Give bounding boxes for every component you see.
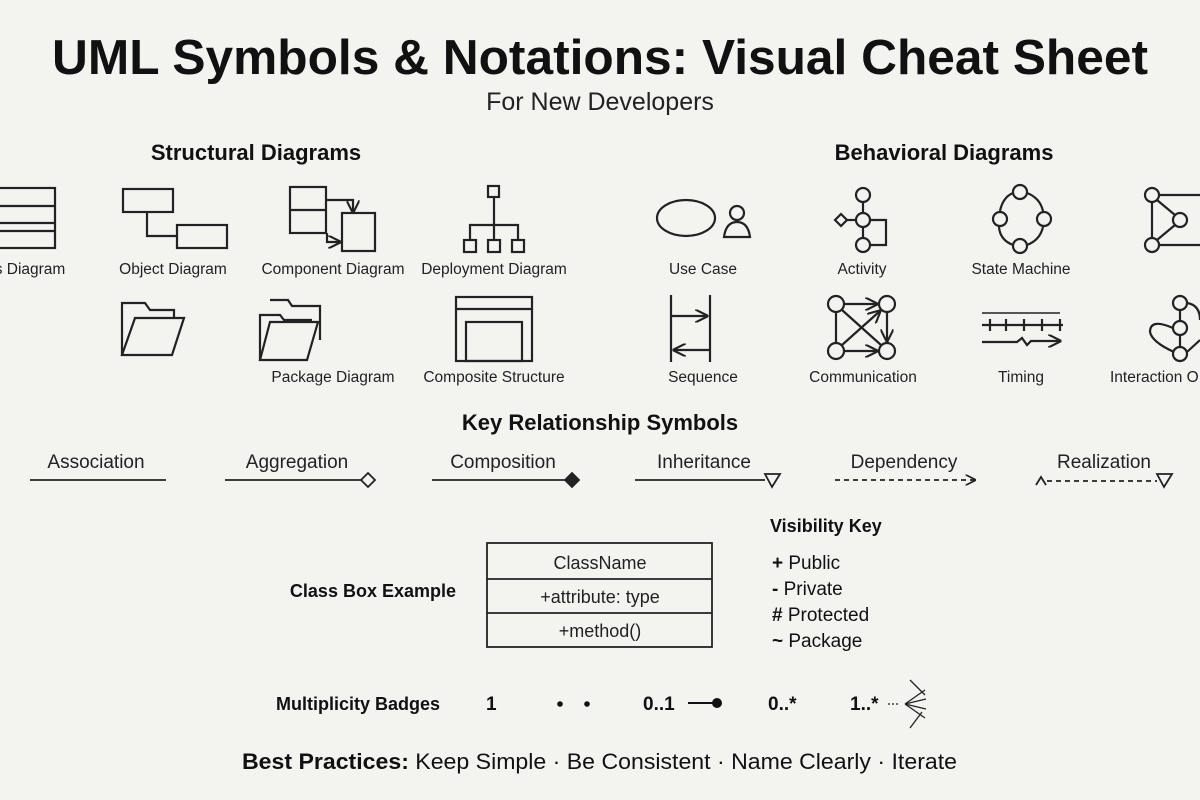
panel: relationships: Association (47, 452, 145, 473)
icon: sequence (671, 295, 710, 362)
icon: state machine (993, 185, 1051, 253)
behavioral labels: Use Case (669, 261, 737, 278)
panel: relationships: Dependency (851, 452, 958, 473)
icon: object diagram (123, 189, 227, 248)
icon: class diagram (0, 188, 55, 248)
behavioral labels: Sequence (668, 369, 738, 386)
icon: activity (835, 188, 886, 252)
visibility key (770, 516, 882, 652)
class box: +method() (559, 621, 641, 641)
panel: structural icons (0, 186, 532, 361)
icon: folder (122, 303, 184, 355)
icon: package diagram (260, 300, 320, 360)
structural labels: Object Diagram (119, 261, 227, 278)
text: class box example: Class Box Example (290, 581, 456, 601)
panel: relationships: Inheritance (657, 452, 751, 473)
behavioral labels: Communication (809, 369, 917, 386)
panel: relationships: Aggregation (246, 452, 348, 473)
heading: structural: Structural Diagrams (151, 140, 361, 165)
behavioral labels: Interaction O (1110, 369, 1199, 386)
multiplicity badges: 0..* (768, 694, 797, 715)
icon: deployment diagram (464, 186, 524, 252)
behavioral labels: Timing (998, 369, 1044, 386)
visibility key: ~ Package (772, 631, 862, 652)
visibility key: Visibility Key (770, 516, 882, 536)
multiplicity badges: 0..1 (643, 694, 675, 715)
icon: component diagram (290, 187, 375, 251)
structural labels: Package Diagram (271, 369, 395, 386)
class box: +attribute: type (540, 587, 660, 607)
title: UML Symbols & Notations: Visual Cheat Sheet (52, 31, 1148, 85)
icon: composite structure (456, 297, 532, 361)
icon: use case (657, 200, 750, 237)
class box: ClassName (553, 553, 647, 573)
structural labels: Component Diagram (261, 261, 405, 278)
multiplicity badges: 1..* (850, 694, 879, 715)
icon: interaction (1145, 188, 1200, 252)
behavioral labels: State Machine (971, 261, 1071, 278)
visibility key: + Public (772, 553, 840, 574)
multiplicity badges (276, 680, 926, 728)
multiplicity badges: 1 (486, 694, 497, 715)
panel: behavioral icons (657, 185, 1200, 362)
class box (487, 543, 712, 647)
behavioral labels: Activity (837, 261, 887, 278)
panel: relationships: Composition (450, 452, 556, 473)
panel: relationships (30, 452, 1172, 487)
icon: interaction overview (1150, 296, 1200, 361)
icon: timing (982, 313, 1063, 345)
heading: behavioral: Behavioral Diagrams (835, 140, 1053, 165)
structural labels: Composite Structure (423, 369, 565, 386)
visibility key: # Protected (772, 605, 869, 626)
structural labels (0, 261, 567, 386)
subtitle: For New Developers (486, 88, 714, 116)
structural labels: Deployment Diagram (421, 261, 567, 278)
multiplicity badges: Multiplicity Badges (276, 694, 440, 714)
icon: communication (828, 296, 895, 359)
heading: relationships: Key Relationship Symbols (462, 410, 738, 435)
best practices: Best Practices: Keep Simple · Be Consistent · Name Clearly · Iterate (242, 749, 957, 774)
panel: relationships: Realization (1057, 452, 1151, 473)
behavioral labels (668, 261, 1199, 386)
visibility key: - Private (772, 579, 843, 600)
